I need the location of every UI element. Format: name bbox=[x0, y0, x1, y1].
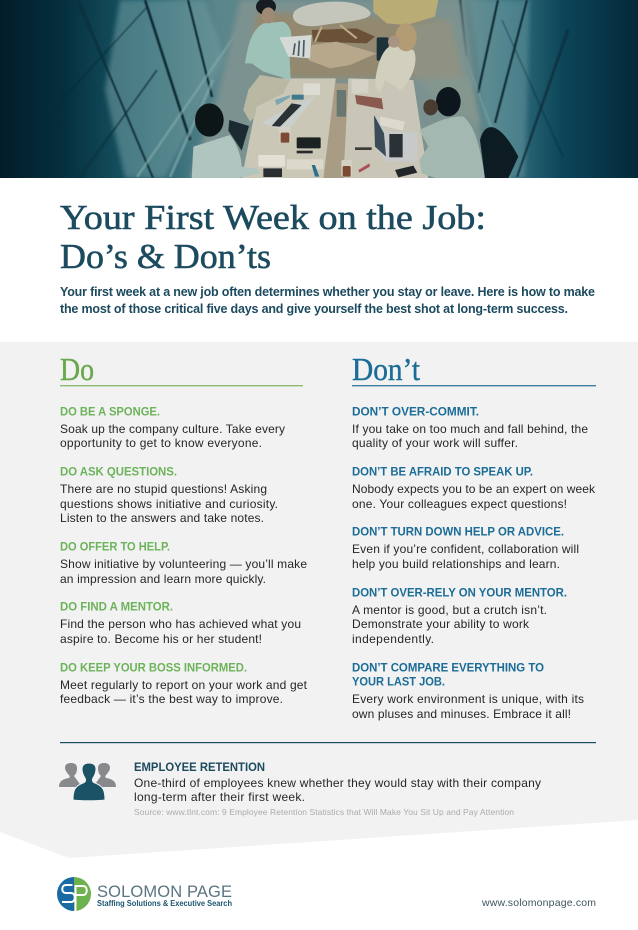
don't: over-commit: DON’T OVER-COMMIT. bbox=[352, 404, 479, 418]
intro text: the most of those critical five days and give yourself the best shot at long-term success. bbox=[60, 302, 568, 316]
icon: three people bbox=[59, 763, 116, 801]
do: boss: Meet regularly to report on your work and get bbox=[60, 678, 308, 692]
do: mentor bbox=[60, 600, 301, 646]
don't: turn down: DON’T TURN DOWN HELP OR ADVICE. bbox=[352, 524, 564, 538]
do: sponge: DO BE A SPONGE. bbox=[60, 404, 160, 418]
do: boss: feedback — it’s the best way to improve. bbox=[60, 692, 283, 706]
do: mentor: DO FIND A MENTOR. bbox=[60, 600, 173, 614]
do: questions bbox=[60, 464, 278, 525]
woman with blond hair bbox=[375, 45, 415, 93]
do: sponge: Soak up the company culture. Take every bbox=[60, 422, 285, 436]
don't: compare bbox=[352, 660, 584, 721]
panel: don't column bbox=[352, 351, 596, 721]
do: mentor: Find the person who has achieved what you bbox=[60, 617, 301, 631]
don't: turn down bbox=[352, 524, 579, 571]
don't: over-rely: DON’T OVER-RELY ON YOUR MENTOR. bbox=[352, 586, 567, 600]
don't: compare: DON’T COMPARE EVERYTHING TO bbox=[352, 660, 544, 674]
do: boss bbox=[60, 660, 308, 706]
retention text bbox=[134, 776, 541, 804]
furniture bbox=[242, 0, 438, 178]
don't: over-commit: If you take on too much and fall behind, the bbox=[352, 422, 588, 436]
do: questions: questions shows initiative and curiosity. bbox=[60, 497, 278, 511]
source: Source: www.tlnt.com: 9 Employee Retention Statistics that Will Make You Sit Up and Pay Attention bbox=[134, 807, 514, 817]
heading: don't: Don’t bbox=[352, 351, 420, 387]
website url: www.solomonpage.com bbox=[481, 897, 596, 909]
do: mentor: aspire to. Become his or her student! bbox=[60, 632, 262, 646]
do: offer: DO OFFER TO HELP. bbox=[60, 540, 170, 554]
logo: solomon page bbox=[57, 877, 232, 911]
intro text bbox=[60, 285, 595, 316]
don't: over-rely: Demonstrate your ability to work bbox=[352, 617, 530, 631]
don't: compare: own pluses and minuses. Embrace it all! bbox=[352, 707, 571, 721]
retention heading: EMPLOYEE RETENTION bbox=[134, 760, 265, 774]
grey content panel bbox=[0, 342, 638, 858]
don't: afraid: DON’T BE AFRAID TO SPEAK UP. bbox=[352, 464, 533, 478]
don't: over-commit: quality of your work will suffer. bbox=[352, 436, 518, 450]
chair right bbox=[480, 127, 518, 178]
don't: compare: Every work environment is unique, with its bbox=[352, 692, 584, 706]
title: Your First Week on the Job: bbox=[60, 198, 486, 237]
don't: afraid: Nobody expects you to be an expert on week bbox=[352, 482, 596, 496]
do: offer bbox=[60, 540, 307, 586]
icon: sp circle bbox=[57, 877, 91, 911]
desk items bbox=[258, 79, 417, 177]
photo banner: team meeting around a table bbox=[0, 0, 638, 178]
panel: do column bbox=[60, 351, 308, 706]
don't: over-rely: A mentor is good, but a crutch isn’t. bbox=[352, 603, 547, 617]
don't: turn down: help you build relationships and learn. bbox=[352, 557, 560, 571]
do: questions: There are no stupid questions! Asking bbox=[60, 482, 267, 496]
panel: employee retention bbox=[59, 760, 541, 817]
retention text: One-third of employees knew whether they would stay with their company bbox=[134, 776, 541, 790]
do: questions: Listen to the answers and take notes. bbox=[60, 511, 264, 525]
do: offer: Show initiative by volunteering — you’ll make bbox=[60, 557, 307, 571]
tables bbox=[242, 78, 336, 178]
do: offer: an impression and learn more quickly. bbox=[60, 572, 266, 586]
don't: compare: YOUR LAST JOB. bbox=[352, 674, 445, 688]
man right bbox=[419, 116, 485, 178]
don't: afraid: one. Your colleagues expect questions! bbox=[352, 497, 567, 511]
man left bbox=[192, 135, 260, 178]
intro text: Your first week at a new job often determines whether you stay or leave. Here is how to make bbox=[60, 285, 595, 299]
heading: do: Do bbox=[60, 351, 94, 387]
logo: solomon page: Staffing Solutions & Executive Search bbox=[97, 899, 232, 908]
don't: afraid bbox=[352, 464, 596, 511]
chair behind blonde woman bbox=[377, 37, 389, 61]
don't: turn down: Even if you’re confident, collaboration will bbox=[352, 542, 579, 556]
do: sponge: opportunity to get to know everyone. bbox=[60, 436, 262, 450]
logo: solomon page: SOLOMON PAGE bbox=[97, 883, 232, 901]
do: boss: DO KEEP YOUR BOSS INFORMED. bbox=[60, 660, 247, 674]
floor bbox=[190, 0, 485, 178]
don't: over-rely bbox=[352, 586, 567, 646]
round table bbox=[293, 2, 371, 26]
chair left bbox=[228, 120, 249, 151]
people bbox=[192, 0, 518, 178]
title bbox=[60, 198, 486, 276]
title: Do’s & Don’ts bbox=[60, 237, 271, 276]
don't: over-commit bbox=[352, 404, 588, 450]
retention text: long-term after their first week. bbox=[134, 790, 305, 804]
woman with chart bbox=[245, 22, 291, 80]
do: questions: DO ASK QUESTIONS. bbox=[60, 464, 177, 478]
do: sponge bbox=[60, 404, 285, 450]
glass walls bbox=[50, 0, 568, 178]
don't: over-rely: independently. bbox=[352, 632, 434, 646]
rug shadow and light patches bbox=[312, 28, 375, 43]
yellow chair bbox=[373, 0, 438, 25]
